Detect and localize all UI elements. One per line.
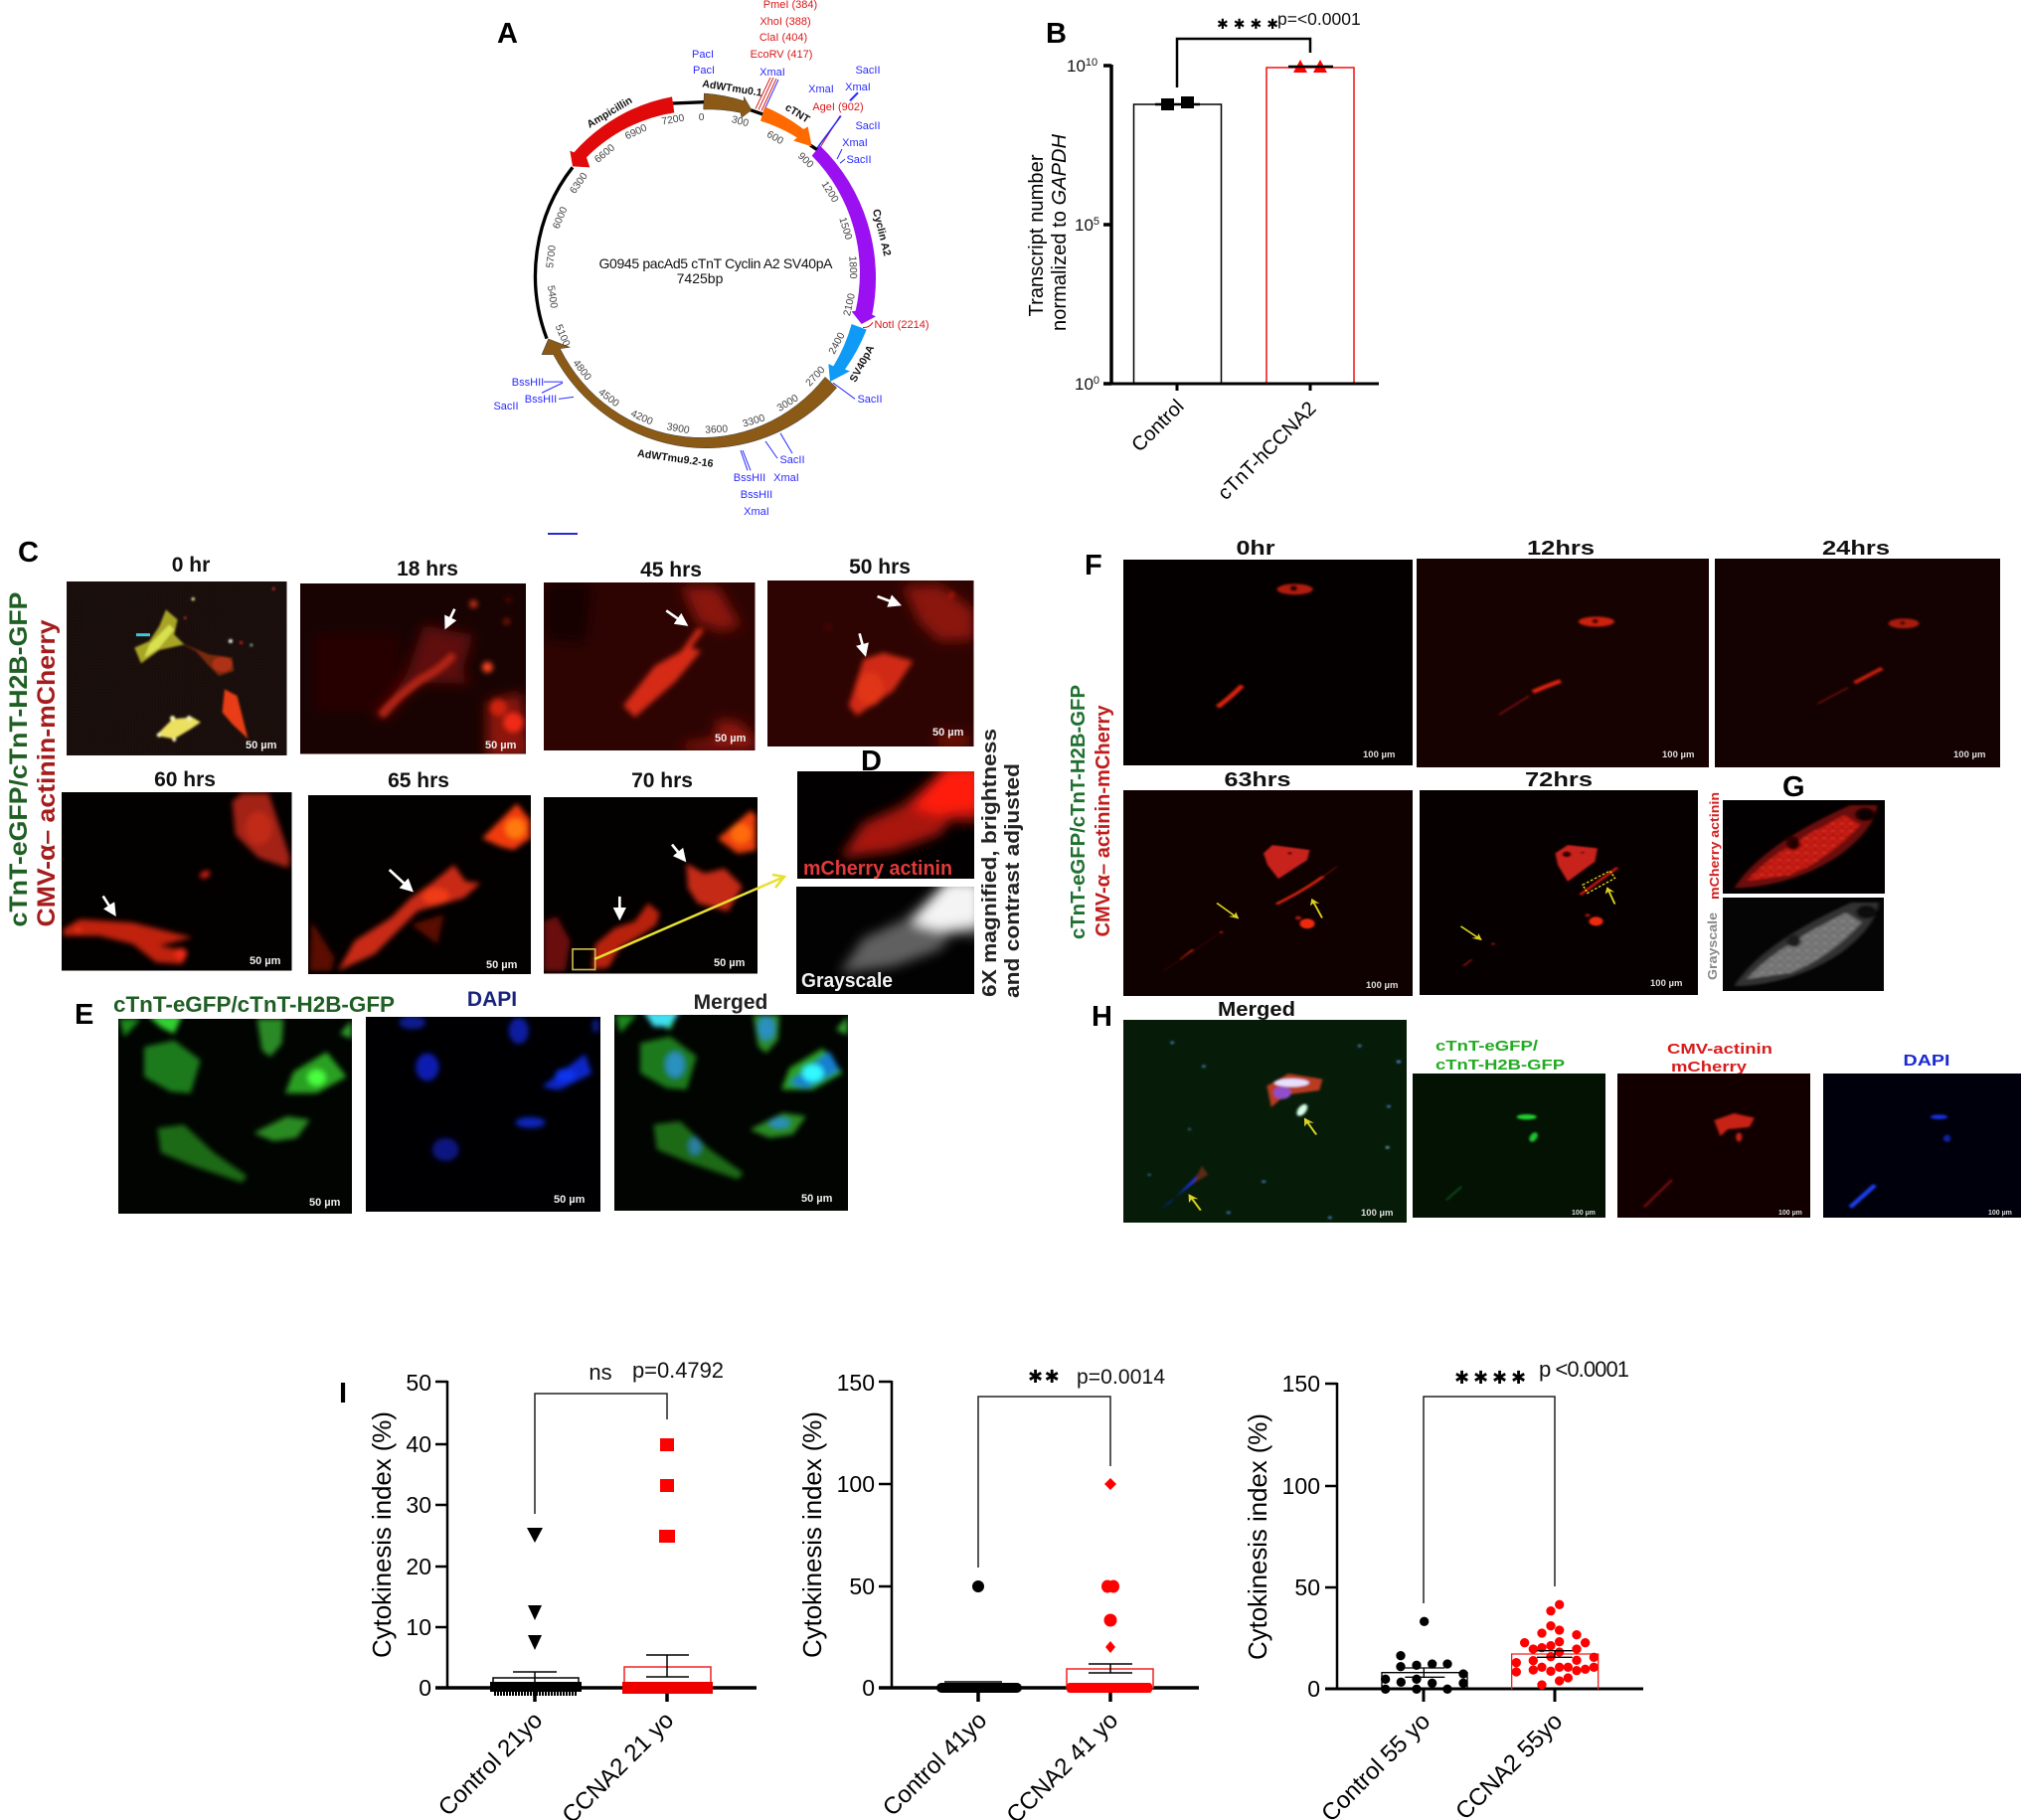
- base pair tick labels: 4800: [571, 358, 593, 383]
- restriction enzyme labels: SacII: [855, 65, 881, 77]
- feature labels: Cyclin A2: [870, 208, 893, 257]
- time labels: 0hr: [1237, 538, 1275, 560]
- image: merged: [1123, 1020, 1407, 1223]
- y axis title: Cytokinesis index (%): [1243, 1413, 1272, 1660]
- scale labels: 100 µm: [1650, 978, 1682, 989]
- y tick labels: 10: [1086, 57, 1097, 69]
- y tick labels: 100: [1282, 1473, 1320, 1499]
- chart: 21 yo: [367, 1358, 757, 1820]
- image: merged: [614, 1015, 848, 1211]
- bracket: [535, 1394, 667, 1514]
- image: 18 hrs: [300, 583, 526, 753]
- feature labels: Ampicillin: [585, 94, 634, 131]
- significance label: [1454, 1357, 1629, 1389]
- vertical label: grayscale: Grayscale: [1705, 912, 1720, 980]
- restriction enzyme labels: EcoRV (417): [751, 49, 812, 61]
- inset: grayscale: [796, 887, 974, 994]
- significance label: ns: [589, 1360, 612, 1385]
- time labels: 60 hrs: [154, 768, 216, 791]
- image: DAPI: [366, 1017, 600, 1212]
- time labels: 12hrs: [1527, 538, 1595, 560]
- feature labels: AdWTmu9.2-16: [636, 447, 714, 470]
- vertical green label: cTnT-eGFP/cTnT-H2B-GFP: [1068, 685, 1090, 939]
- image: 65 hrs: [308, 795, 531, 974]
- base pair tick labels: 900: [795, 151, 815, 171]
- CCNA2 bar and points: [1512, 1600, 1599, 1690]
- restriction enzyme labels: BssHII: [741, 489, 772, 501]
- restriction enzyme labels: XmaI: [808, 83, 834, 95]
- restriction enzyme labels: BssHII: [734, 472, 765, 484]
- scale labels: 100 µm: [1572, 1210, 1596, 1217]
- base pair tick labels: 0: [699, 112, 705, 123]
- vertical green label: cTnT-eGFP/cTnT-H2B-GFP: [5, 592, 33, 926]
- y tick labels: 30: [406, 1492, 431, 1518]
- time labels: 0 hr: [172, 554, 210, 577]
- restriction enzyme labels: SacII: [857, 394, 883, 406]
- scale labels: 50 µm: [250, 955, 281, 967]
- restriction enzyme labels: SacII: [846, 154, 872, 166]
- y tick labels: 10: [1075, 216, 1094, 235]
- significance label: [1028, 1366, 1165, 1389]
- time labels: 18 hrs: [397, 558, 458, 580]
- significance bracket: [1177, 39, 1310, 87]
- restriction enzyme labels: AgeI (902): [812, 101, 864, 113]
- heading: actinin channel: CMV-actinin: [1667, 1041, 1772, 1058]
- heading: GFP channel: cTnT-eGFP/: [1435, 1038, 1539, 1055]
- base pair tick labels: 4200: [629, 409, 654, 427]
- image: 70 hrs: [544, 797, 758, 974]
- image: 72hrs: [1420, 790, 1698, 995]
- image: GFP: [118, 1019, 352, 1214]
- stray blue mark: [548, 533, 578, 535]
- scale labels: [246, 727, 964, 971]
- significance label: p=<0.0001: [1277, 9, 1361, 29]
- y tick labels: 0: [1094, 375, 1099, 387]
- panel letter B: B: [1046, 18, 1067, 50]
- y tick labels: 50: [406, 1370, 431, 1396]
- feature: Ampicillin: [570, 96, 674, 167]
- significance label: p <0.0001: [1539, 1357, 1629, 1382]
- y tick labels: 20: [406, 1554, 431, 1579]
- restriction enzyme labels: SacII: [779, 454, 805, 466]
- panel letter H: H: [1092, 1001, 1112, 1033]
- plasmid name: [598, 255, 833, 286]
- panel I: cytokinesis index charts: [339, 1357, 1643, 1820]
- base pair tick labels: 1800: [846, 255, 858, 279]
- x labels: [433, 1707, 679, 1820]
- y axis title: Cytokinesis index (%): [797, 1411, 827, 1658]
- y tick labels: [406, 1370, 431, 1701]
- y tick labels: 150: [837, 1370, 875, 1396]
- scale labels: 100 µm: [1953, 749, 1985, 760]
- scale labels: 50 µm: [715, 733, 747, 745]
- bracket: [1424, 1397, 1555, 1603]
- treatment markers: [1288, 60, 1333, 73]
- y tick labels: 0: [862, 1675, 875, 1701]
- panel E: stained cells: [75, 988, 848, 1214]
- panel letter E: E: [75, 999, 93, 1031]
- y tick labels: 0: [1307, 1676, 1320, 1702]
- bracket: [978, 1397, 1110, 1568]
- time labels: 63hrs: [1225, 769, 1290, 791]
- x labels: cTnT-hCCNA2: [1214, 398, 1321, 504]
- base pair tick labels: 2700: [804, 365, 828, 389]
- scale labels: 100 µm: [1363, 749, 1395, 760]
- control bar and points: [490, 1528, 582, 1694]
- panel G: magnified cell: [1705, 771, 1885, 991]
- time labels: [1225, 538, 1890, 791]
- x labels: [1316, 1708, 1568, 1820]
- heading: actinin channel: [1667, 1041, 1772, 1075]
- y axis title: Transcript number: [1026, 154, 1048, 316]
- base pair tick labels: 5400: [545, 285, 559, 309]
- panel F: time-lapse images: [1068, 538, 2000, 996]
- image: 24hrs: [1715, 559, 2000, 767]
- inset: mCherry actinin: [797, 771, 974, 879]
- y tick labels: 50: [1294, 1574, 1320, 1600]
- y axis title: Cytokinesis index (%): [367, 1411, 397, 1658]
- time labels: 45 hrs: [640, 559, 702, 581]
- scale labels: 50 µm: [554, 1194, 586, 1206]
- restriction enzyme labels: SacII: [493, 401, 519, 413]
- restriction enzyme labels: PacI: [693, 65, 715, 77]
- axes: [1325, 1383, 1337, 1690]
- y tick labels: 10: [1075, 375, 1094, 394]
- base pair tick labels: 6000: [552, 205, 570, 231]
- vertical red label: CMV-α– actinin-mCherry: [1093, 705, 1114, 936]
- y tick labels: 150: [1282, 1371, 1320, 1397]
- y axis title: [1026, 133, 1071, 331]
- bar: cTnT-hCCNA2: [1266, 68, 1354, 384]
- significance label: p=0.4792: [632, 1358, 724, 1383]
- y tick labels: 10: [1067, 57, 1086, 76]
- scale labels: 100 µm: [1366, 980, 1398, 991]
- plasmid ring and features: [535, 93, 893, 470]
- restriction enzyme labels: BssHII: [512, 377, 544, 389]
- base pair tick labels: 3000: [775, 393, 801, 414]
- heading: DAPI channel: DAPI: [1903, 1053, 1950, 1070]
- feature labels: SV40pA: [848, 343, 877, 385]
- axes: [879, 1381, 892, 1689]
- image: 63hrs: [1123, 790, 1413, 996]
- y tick labels: 0: [419, 1675, 431, 1701]
- x labels: Control 41yo: [878, 1707, 992, 1820]
- scale labels: 100 µm: [1361, 1208, 1393, 1219]
- vertical note: 6X magnified, brightness: [979, 729, 1001, 997]
- restriction enzyme labels: XmaI: [744, 506, 769, 518]
- image: 45 hrs: [544, 582, 756, 750]
- significance label: p=0.0014: [1077, 1366, 1165, 1389]
- vertical note: [979, 729, 1024, 998]
- base pair tick labels: 6600: [592, 142, 617, 166]
- time labels: [154, 554, 911, 792]
- significance label: [1217, 9, 1361, 33]
- feature labels: [585, 94, 893, 470]
- channel headings: Merged: [694, 991, 767, 1014]
- scale labels: [1363, 749, 1985, 991]
- CCNA2 bar and points: [1067, 1478, 1153, 1693]
- x labels: [878, 1707, 1123, 1820]
- panel B: transcript bar chart: [1026, 9, 1379, 504]
- feature: AdWTmu9.2-16: [542, 339, 837, 448]
- base pair tick labels: 4500: [596, 387, 621, 410]
- scale labels: [309, 1193, 833, 1209]
- base pair tick labels: 1500: [836, 216, 854, 242]
- time labels: 50 hrs: [849, 556, 911, 579]
- panel letter F: F: [1085, 550, 1102, 581]
- label: AdWTmu0.1: AdWTmu0.1: [702, 78, 763, 99]
- heading: merged: Merged: [1218, 999, 1295, 1021]
- scale labels: 50 µm: [932, 727, 964, 739]
- base pair tick labels: 2100: [842, 292, 858, 317]
- y tick labels: [1282, 1371, 1320, 1702]
- significance label: ✱✱✱✱: [1454, 1368, 1530, 1389]
- restriction enzyme labels: XmaI: [842, 137, 868, 149]
- x labels: [1127, 396, 1321, 504]
- scale labels: 100 µm: [1778, 1210, 1802, 1217]
- image: 50 hrs: [767, 580, 974, 746]
- restriction enzyme labels: [493, 0, 929, 518]
- base pair tick labels: 6900: [623, 122, 649, 142]
- time labels: 72hrs: [1525, 769, 1593, 791]
- inset label: mCherry actinin: mCherry actinin: [803, 858, 952, 880]
- channel headings: DAPI: [467, 988, 517, 1011]
- restriction enzyme labels: ClaI (404): [759, 32, 807, 44]
- restriction site lines: [542, 78, 873, 470]
- base pair tick labels: 7200: [661, 113, 686, 127]
- scale labels: 50 µm: [714, 957, 746, 969]
- control points: [936, 1580, 1022, 1693]
- restriction enzyme labels: XmaI: [759, 67, 785, 79]
- y tick labels: [837, 1370, 875, 1701]
- restriction enzyme labels: XmaI: [845, 82, 871, 93]
- base pair tick labels: 3600: [705, 424, 729, 436]
- data in zoom coordinates: [1381, 1600, 1599, 1694]
- plasmid name: G0945 pacAd5 cTnT Cyclin A2 SV40pA: [598, 255, 833, 271]
- base pair tick labels: 2400: [827, 331, 848, 356]
- CCNA2 bar and points: [622, 1438, 713, 1694]
- axes: [1103, 65, 1379, 391]
- control bar and points: [1381, 1617, 1468, 1694]
- heading: GFP channel: [1435, 1038, 1565, 1074]
- image: 60 hrs: [62, 792, 292, 970]
- heading: GFP channel: cTnT-H2B-GFP: [1435, 1057, 1565, 1074]
- image: DAPI channel: [1823, 1074, 2021, 1218]
- base pair tick labels: [545, 112, 858, 436]
- base pair tick labels: 300: [731, 114, 750, 129]
- panel A: plasmid map: [493, 0, 929, 518]
- panel C: time-lapse images: [5, 533, 974, 974]
- feature: SV40pA: [828, 324, 867, 382]
- panel H: merged and channels: [1092, 999, 2021, 1223]
- y tick labels: 100: [837, 1471, 875, 1497]
- panel D: magnified insets: [796, 729, 1024, 998]
- scale labels: 50 µm: [309, 1197, 341, 1209]
- scale labels: 50 µm: [246, 740, 277, 751]
- restriction enzyme labels: XhoI (388): [759, 16, 811, 28]
- restriction enzyme labels: XmaI: [773, 472, 799, 484]
- image: GFP channel: [1413, 1074, 1605, 1218]
- image: red cell: [1723, 800, 1885, 894]
- panel letter D: D: [861, 745, 882, 777]
- y tick labels: [1067, 57, 1099, 394]
- channel headings: [113, 988, 767, 1017]
- base pair tick labels: 600: [764, 129, 785, 147]
- significance label: ✱✱: [1028, 1367, 1061, 1388]
- time labels: 70 hrs: [631, 769, 693, 792]
- inset label: grayscale: Grayscale: [801, 970, 893, 992]
- image: 0hr: [1123, 560, 1413, 765]
- restriction enzyme labels: BssHII: [525, 394, 557, 406]
- base pair tick labels: 5700: [545, 245, 559, 268]
- panel letter C: C: [18, 537, 39, 569]
- panel letter I: I: [339, 1378, 347, 1409]
- base pair tick labels: 3300: [742, 413, 766, 430]
- x labels: Control 21yo: [433, 1707, 548, 1820]
- scale labels: 100 µm: [1662, 749, 1694, 760]
- backbone ring: [535, 102, 820, 339]
- y axis title: normalized to GAPDH: [1049, 133, 1071, 331]
- vertical label: mCherry actinin: mCherry actinin: [1707, 792, 1722, 900]
- base pair tick labels: 1200: [819, 180, 840, 205]
- control markers: [1155, 96, 1200, 110]
- arrow: zoom to panel D: [594, 875, 784, 959]
- chart: 41 yo: [797, 1366, 1199, 1820]
- image: 0 hr: [67, 581, 286, 755]
- feature: Cyclin A2: [812, 146, 876, 324]
- panel letter A: A: [497, 18, 518, 50]
- image: 12hrs: [1417, 559, 1709, 767]
- time labels: 65 hrs: [388, 769, 449, 792]
- scale labels: [1361, 1208, 2012, 1219]
- y tick labels: 50: [849, 1573, 875, 1599]
- bar: control: [1133, 104, 1221, 384]
- scale labels: 50 µm: [486, 959, 518, 971]
- feature labels: cTNT: [783, 101, 812, 126]
- significance label: ✱✱✱✱: [1217, 17, 1283, 33]
- scale labels: 100 µm: [1988, 1210, 2012, 1217]
- scale labels: 50 µm: [801, 1193, 833, 1205]
- restriction enzyme labels: NotI (2214): [874, 319, 929, 331]
- base pair tick labels: 5100: [553, 323, 572, 349]
- feature: cTNT: [760, 106, 812, 146]
- scale labels: 50 µm: [485, 740, 517, 751]
- heading: actinin channel: mCherry: [1671, 1059, 1748, 1075]
- time labels: 24hrs: [1822, 538, 1890, 560]
- base pair tick labels: 3900: [666, 421, 691, 436]
- restriction enzyme labels: SacII: [855, 120, 881, 132]
- channel headings: cTnT-eGFP/cTnT-H2B-GFP: [113, 992, 395, 1017]
- restriction enzyme labels: PacI: [692, 49, 714, 61]
- plasmid name: 7425bp: [677, 270, 724, 286]
- base pair tick labels: 6300: [569, 171, 590, 196]
- chart: 55 yo: [1243, 1357, 1643, 1820]
- axes: [435, 1381, 447, 1689]
- image: actinin channel: [1617, 1074, 1810, 1218]
- panel letter G: G: [1782, 771, 1805, 803]
- y tick labels: 5: [1094, 216, 1099, 228]
- feature: AdWTmu0.1: [704, 93, 752, 117]
- vertical red label: CMV-α– actinin-mCherry: [33, 619, 61, 926]
- significance label: [589, 1358, 724, 1385]
- y tick labels: 40: [406, 1431, 431, 1457]
- vertical note: and contrast adjusted: [1002, 763, 1024, 998]
- x labels: Control: [1127, 396, 1189, 456]
- y tick labels: 10: [406, 1614, 431, 1640]
- image: gray cell: [1723, 898, 1884, 991]
